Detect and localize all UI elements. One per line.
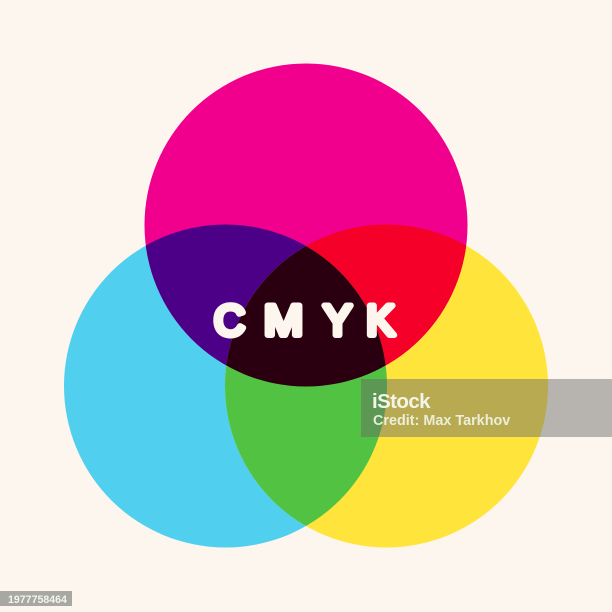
- overlap: all three (black): [226, 246, 386, 386]
- overlap: cyan and magenta (blue): [146, 224, 306, 366]
- overlap: magenta and yellow (red): [226, 224, 466, 366]
- title: CMYK: [214, 298, 395, 345]
- watermark banner: [361, 379, 612, 437]
- watermark logo: iStock: iStock: [372, 390, 431, 413]
- image id number: 1977758464: [8, 594, 67, 606]
- image id tag: [0, 591, 72, 606]
- title: CMYK: Y: [323, 298, 352, 345]
- circle: yellow: [225, 224, 548, 548]
- title: CMYK: C: [214, 298, 245, 345]
- circle: cyan: [64, 224, 387, 548]
- circle: magenta: [144, 64, 468, 386]
- title: CMYK: K: [366, 298, 395, 345]
- overlap: cyan and yellow (green): [225, 246, 387, 526]
- watermark credit: Credit: Max Tarkhov: [373, 413, 510, 429]
- title: CMYK: M: [264, 298, 303, 345]
